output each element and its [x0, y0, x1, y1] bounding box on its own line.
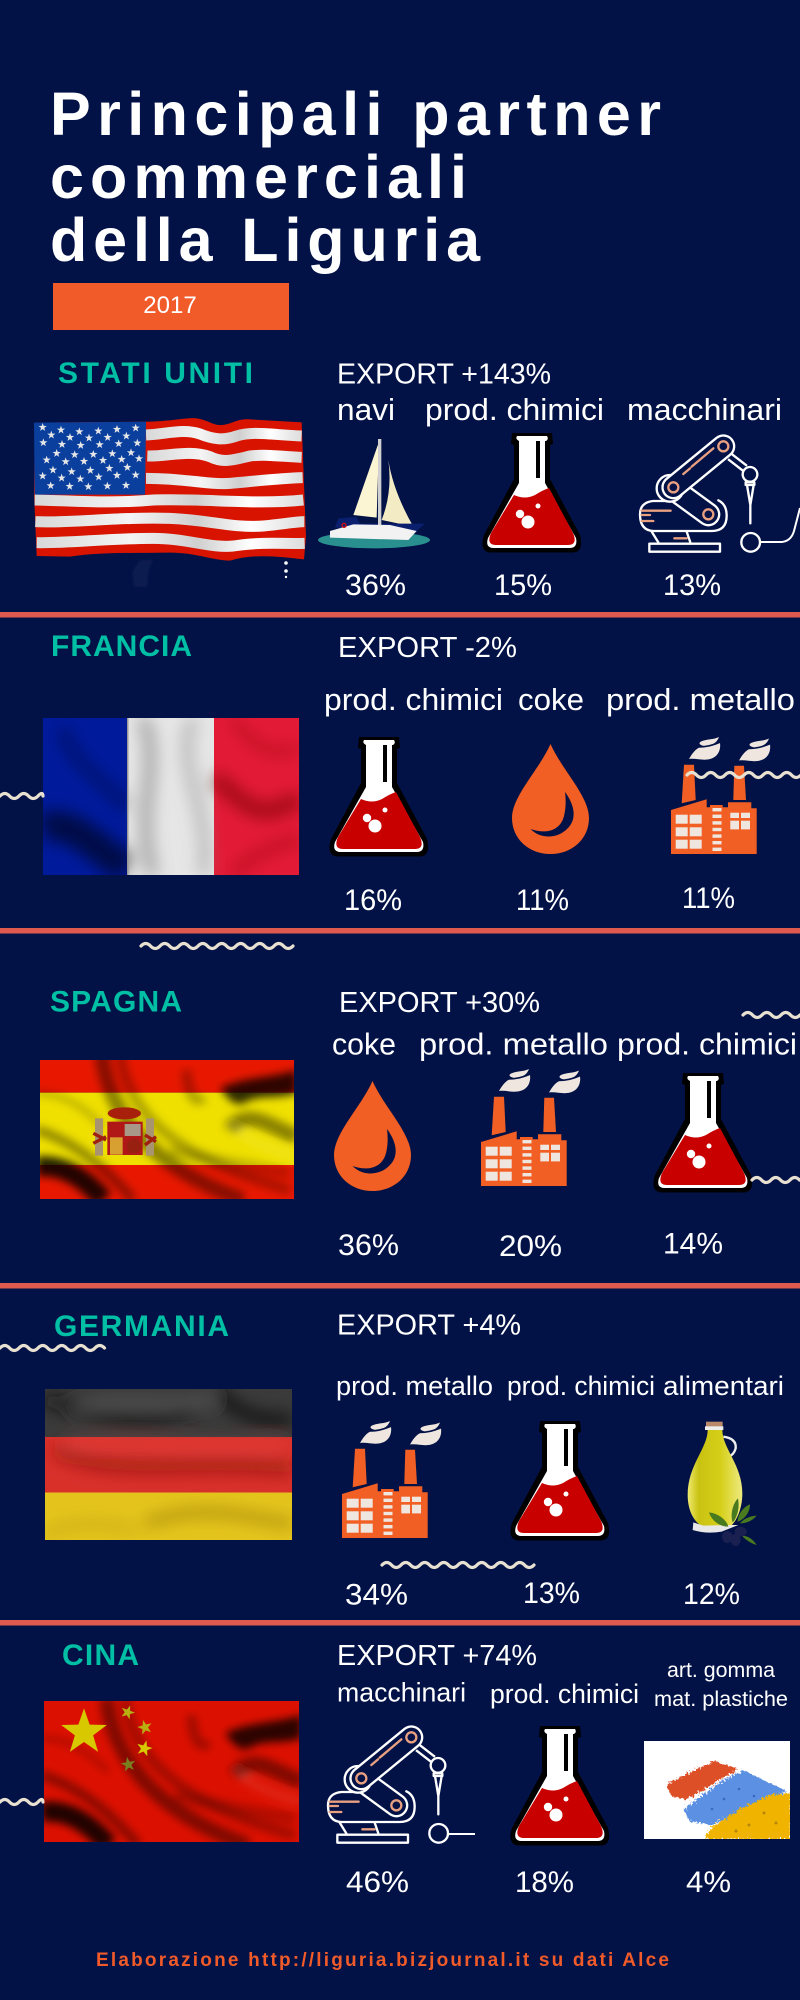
panel: cina — [42, 1639, 790, 1899]
icon: flask — [329, 737, 428, 856]
sector labels: coke — [518, 682, 584, 717]
percentages: 16% — [344, 884, 402, 917]
sector labels: prod. chimici — [324, 682, 503, 717]
percentages: 13% — [663, 569, 721, 602]
percentages: 36% — [345, 569, 406, 602]
sector labels: navi — [337, 392, 395, 427]
panel: germania — [45, 1310, 784, 1612]
flag: Germany — [45, 1389, 292, 1540]
flag pole shadow — [132, 560, 153, 587]
icon: flask — [653, 1073, 752, 1192]
country name: FRANCIA — [51, 630, 192, 663]
export figure: EXPORT +74% — [337, 1640, 537, 1672]
icon: flask — [482, 433, 581, 552]
icon: flask — [510, 1726, 609, 1846]
percentages: 20% — [499, 1230, 562, 1263]
title — [50, 80, 661, 274]
percentages — [345, 569, 721, 602]
flag: France — [43, 718, 299, 875]
country name: SPAGNA — [50, 986, 182, 1018]
export figure: EXPORT +30% — [339, 987, 540, 1019]
icon: robot arm — [328, 1732, 475, 1843]
year badge — [53, 283, 289, 330]
percentages: 46% — [346, 1866, 409, 1899]
sector labels: art. gomma — [667, 1659, 775, 1682]
percentages — [346, 1866, 731, 1899]
flag: Spain — [40, 1060, 294, 1199]
divider — [0, 928, 800, 934]
sector labels: prod. chimici — [507, 1371, 655, 1401]
icon: coke drop — [512, 744, 589, 854]
sector labels: prod. metallo — [336, 1371, 493, 1401]
sector labels — [324, 682, 795, 717]
sector labels — [332, 1026, 797, 1062]
export figure: EXPORT +143% — [337, 358, 551, 390]
percentages — [344, 882, 735, 917]
divider — [0, 612, 800, 618]
percentages: 18% — [515, 1866, 574, 1899]
percentages: 11% — [682, 882, 735, 915]
export figure: EXPORT +4% — [337, 1310, 521, 1342]
year badge: 2017 — [143, 292, 197, 319]
icon: factory — [342, 1421, 441, 1538]
icon: robot arm — [640, 441, 800, 552]
photo: plastic granules — [644, 1741, 790, 1839]
flag: USA — [34, 418, 306, 561]
icon: factory — [671, 737, 770, 854]
sector labels: prod. metallo — [606, 682, 795, 717]
percentages: 36% — [338, 1229, 399, 1262]
sector labels: mat. plastiche — [654, 1688, 788, 1711]
percentages: 14% — [663, 1228, 723, 1260]
panel: spagna — [37, 986, 797, 1263]
percentages: 12% — [683, 1578, 740, 1611]
title: Principali partner — [50, 80, 661, 148]
country name: STATI UNITI — [58, 357, 253, 390]
sector labels: prod. metallo — [419, 1026, 608, 1062]
title: della Liguria — [50, 206, 481, 274]
export figure: EXPORT -2% — [338, 632, 517, 664]
flag: China — [44, 1701, 299, 1842]
panel: francia — [43, 630, 795, 917]
percentages: 15% — [494, 569, 552, 602]
sector labels: alimentari — [663, 1371, 784, 1401]
percentages: 34% — [345, 1578, 408, 1612]
icon: flask — [510, 1421, 609, 1540]
percentages — [345, 1577, 740, 1612]
country name: CINA — [62, 1639, 139, 1672]
country name: GERMANIA — [54, 1310, 229, 1343]
sector labels — [337, 392, 782, 427]
percentages: 13% — [523, 1577, 580, 1610]
icon: factory — [481, 1069, 580, 1186]
divider — [0, 1620, 800, 1626]
panel: stati uniti — [34, 357, 800, 602]
percentages: 11% — [516, 884, 569, 917]
footer source: Elaborazione http://liguria.bizjournal.it su dati Alce — [96, 1950, 669, 1971]
sector labels — [337, 1659, 788, 1711]
sector labels: prod. chimici — [425, 392, 604, 427]
divider — [0, 1283, 800, 1288]
percentages — [338, 1228, 723, 1263]
icon: olive oil bottle — [688, 1422, 757, 1546]
sector labels: coke — [332, 1026, 396, 1062]
title: commerciali — [50, 143, 467, 211]
sector labels: prod. chimici — [617, 1026, 797, 1062]
decorative waves — [0, 772, 800, 1804]
percentages: 4% — [686, 1866, 731, 1899]
icon: coke drop — [334, 1081, 411, 1191]
sector labels: macchinari — [627, 392, 782, 427]
sector labels: prod. chimici — [490, 1679, 639, 1709]
icon: sailboat — [318, 439, 430, 548]
sector labels — [336, 1371, 784, 1401]
sector labels: macchinari — [337, 1678, 466, 1708]
dots — [284, 561, 288, 578]
